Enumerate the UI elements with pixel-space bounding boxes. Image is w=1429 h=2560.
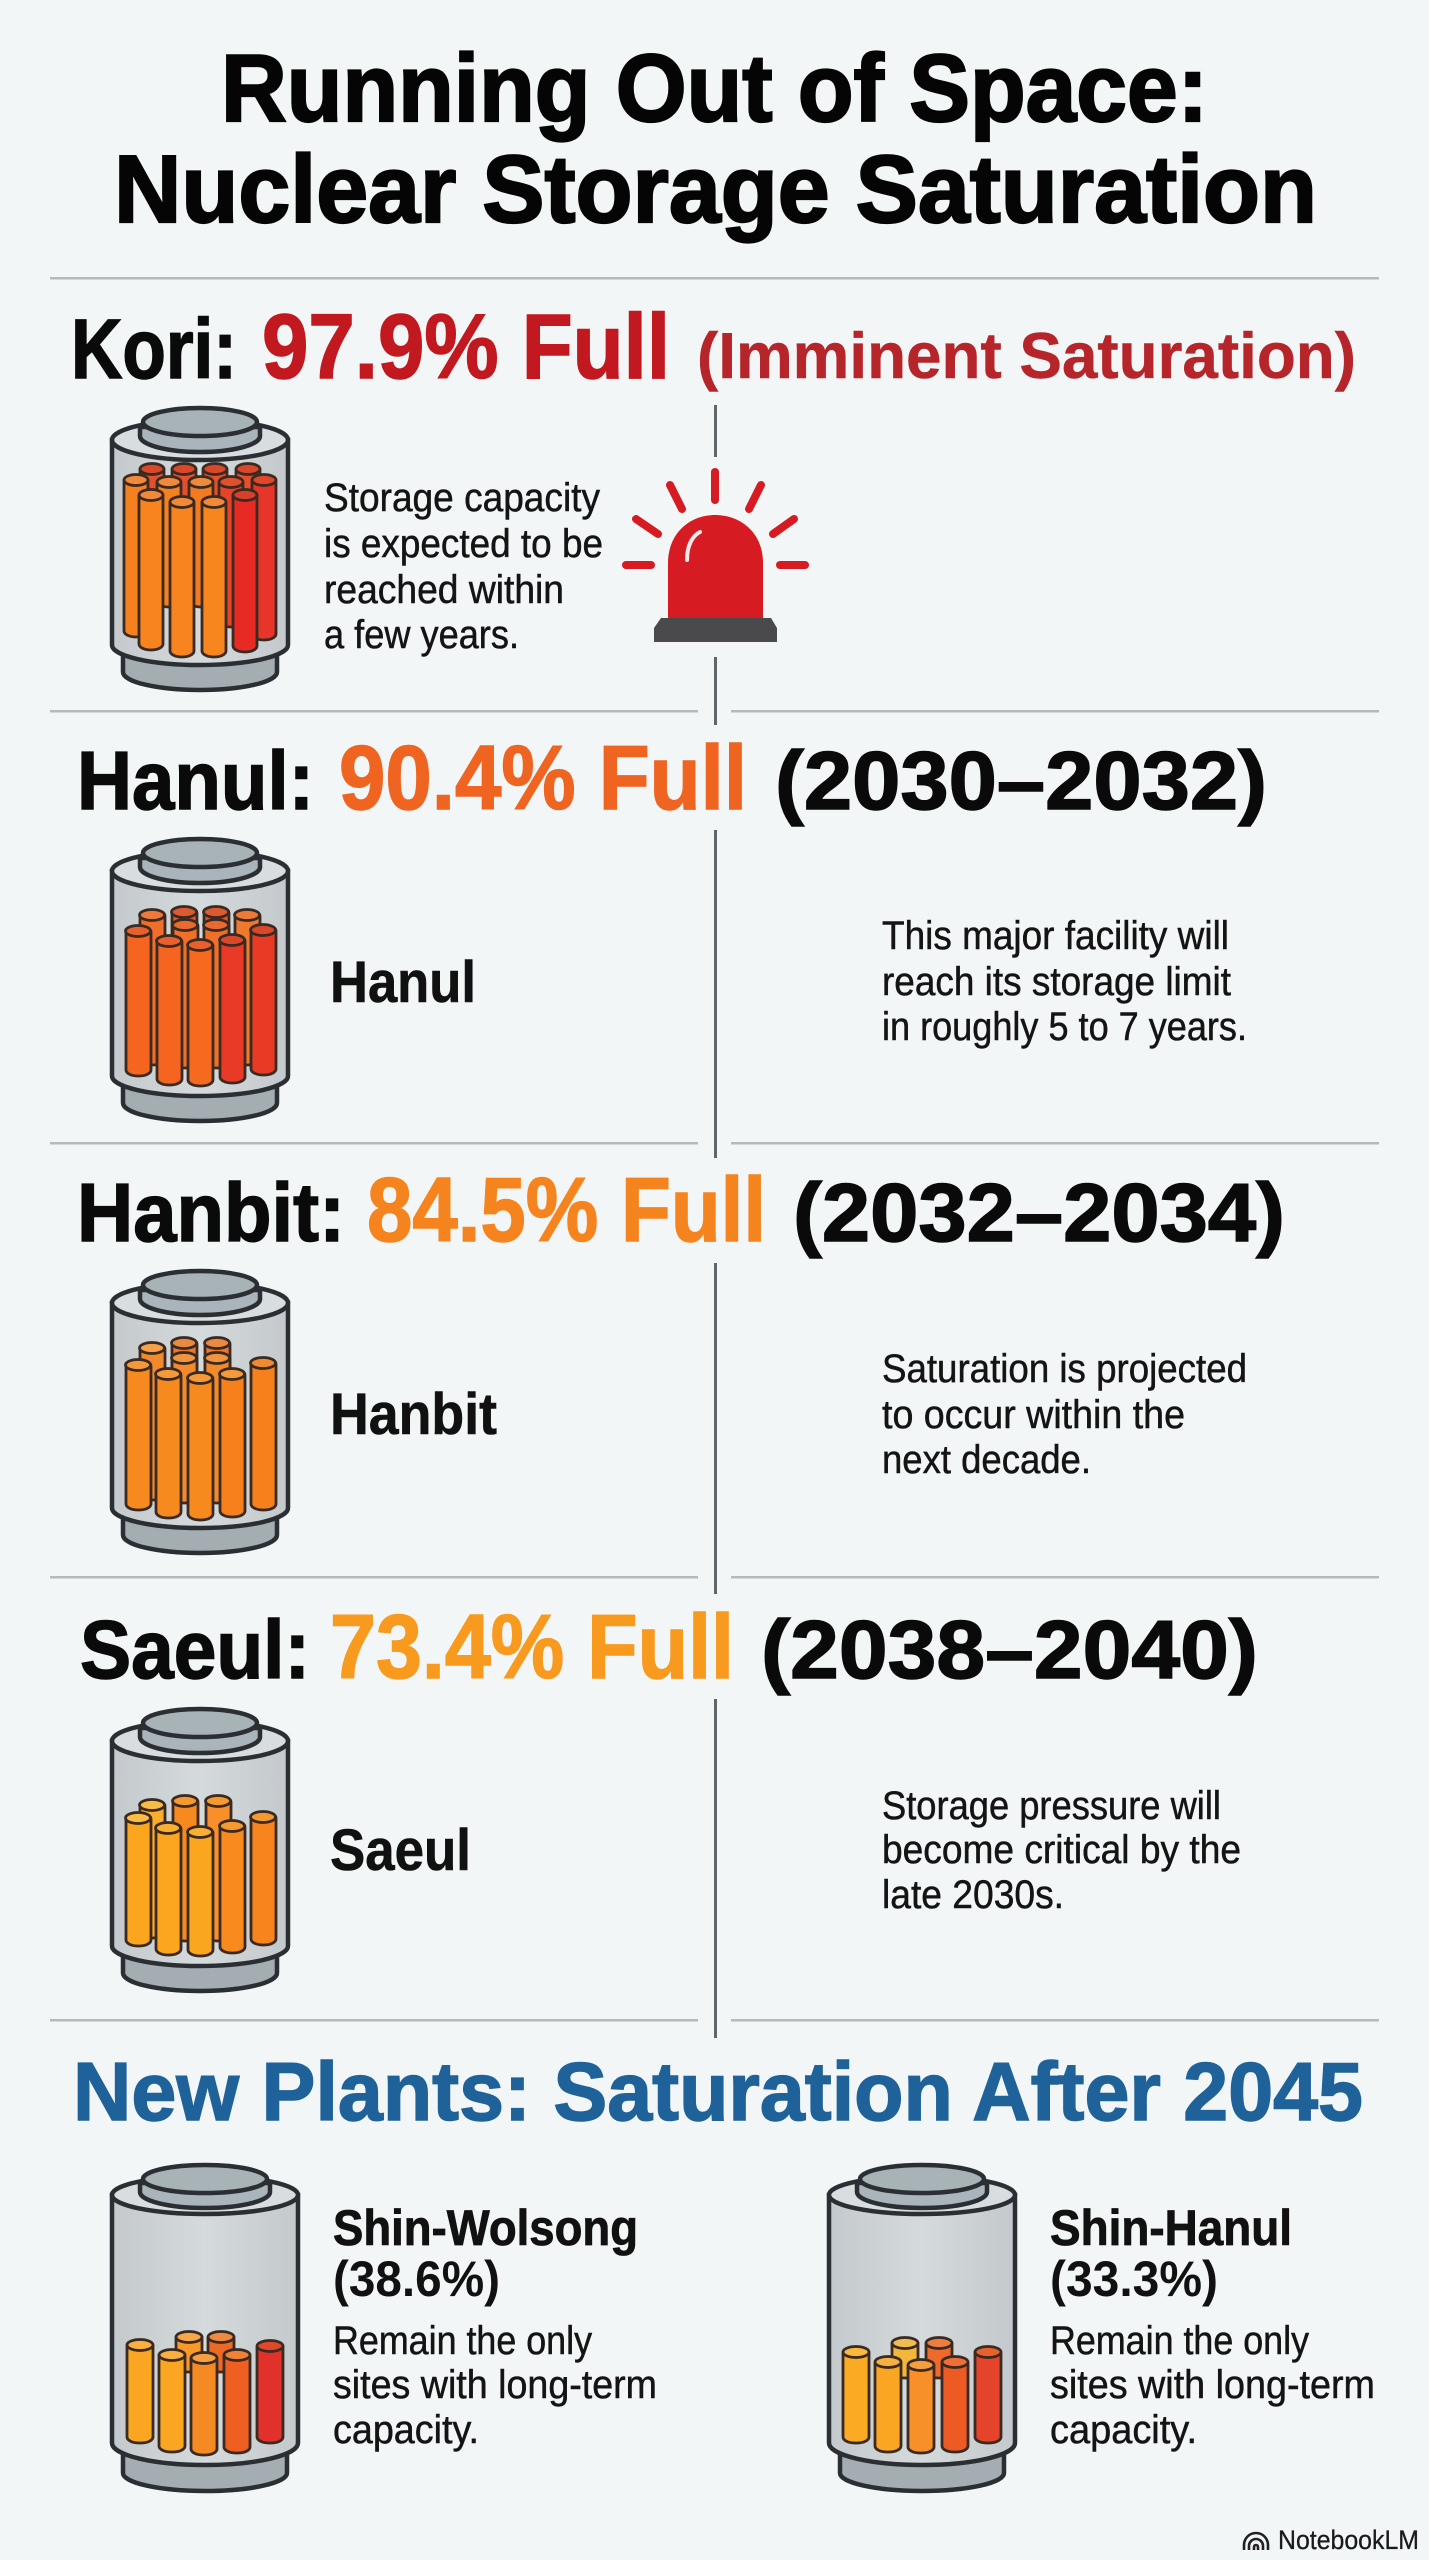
heading: Saeul: (2038–2040) (761, 1603, 1258, 1696)
text: Hanul description (882, 914, 1247, 1049)
icon: Kori canister (112, 408, 288, 690)
heading: Saeul: Saeul: (80, 1603, 310, 1696)
text: Kori description: reached within (324, 568, 564, 612)
label: Saeul: Saeul (330, 1818, 471, 1883)
text: Kori description: a few years. (324, 613, 519, 657)
text: Hanul description: This major facility will (882, 914, 1229, 958)
title: Nuclear Storage Saturation (114, 136, 1317, 243)
text: Hanbit description (882, 1347, 1247, 1482)
text: Kori description: Storage capacity (324, 476, 600, 520)
text: Shin-Hanul: sites with long-term (1050, 2363, 1375, 2407)
heading: Saeul: 73.4% Full (330, 1597, 734, 1698)
text: Hanbit description: next decade. (882, 1438, 1091, 1482)
heading: Kori: (Imminent Saturation) (697, 319, 1356, 392)
icon: Shin-Hanul canister (829, 2165, 1015, 2491)
icon: Hanbit canister (112, 1271, 288, 1553)
icon: NotebookLM arches (1244, 2533, 1268, 2550)
text: Shin-Wolsong (333, 2200, 657, 2452)
card: Shin-Hanul (829, 2165, 1375, 2491)
text: Shin-Hanul (1050, 2200, 1375, 2452)
heading: Hanbit: 84.5% Full (367, 1160, 766, 1261)
heading: Hanbit: (2032–2034) (793, 1166, 1285, 1259)
text: Hanbit description: to occur within the (882, 1393, 1185, 1437)
heading: Hanbit (77, 1160, 1285, 1261)
icon: Shin-Wolsong canister (112, 2165, 298, 2491)
heading: Kori: Kori: (71, 302, 237, 396)
heading: Saeul (80, 1597, 1258, 1698)
text: Kori description: is expected to be (324, 522, 603, 566)
heading: Hanbit: Hanbit: (77, 1166, 345, 1259)
icon: red alarm siren (626, 472, 805, 642)
panel: Kori (71, 296, 1356, 690)
text: Shin-Wolsong: sites with long-term (333, 2363, 657, 2407)
text: Shin-Hanul: (33.3%) (1050, 2251, 1218, 2307)
panel: Hanul (77, 728, 1267, 1121)
heading: Kori (71, 296, 1356, 398)
icon: Saeul canister (112, 1709, 288, 1991)
text: Hanul description: in roughly 5 to 7 years. (882, 1005, 1247, 1049)
text: Shin-Wolsong: Shin-Wolsong (333, 2200, 638, 2256)
text: Saeul description: become critical by the (882, 1828, 1241, 1872)
text: Shin-Hanul: capacity. (1050, 2408, 1197, 2452)
heading: Hanul: Hanul: (77, 734, 314, 827)
text: Saeul description: Storage pressure will (882, 1784, 1221, 1828)
text: Saeul description (882, 1784, 1241, 1917)
title (114, 35, 1317, 243)
label: Hanbit: Hanbit (330, 1382, 497, 1447)
heading: Hanul (77, 728, 1267, 829)
text: Shin-Wolsong: Remain the only (333, 2319, 592, 2363)
heading: Hanul: 90.4% Full (339, 728, 747, 829)
text: Shin-Wolsong: (38.6%) (333, 2251, 500, 2307)
text: Shin-Hanul: Remain the only (1050, 2319, 1309, 2363)
text: Hanul description: reach its storage limit (882, 960, 1231, 1004)
heading: New Plants: New Plants: Saturation After 2045 (73, 2045, 1363, 2138)
text: Shin-Hanul: Shin-Hanul (1050, 2200, 1292, 2256)
heading: Hanul: (2030–2032) (775, 734, 1267, 827)
panel: Hanbit (77, 1160, 1285, 1553)
NotebookLM logo: NotebookLM (1278, 2525, 1419, 2555)
panel: New Plants (73, 2045, 1375, 2491)
card: Shin-Wolsong (112, 2165, 657, 2491)
text: Kori description (324, 476, 603, 657)
text: Saeul description: late 2030s. (882, 1873, 1064, 1917)
icon: Hanul canister (112, 839, 288, 1121)
label: Hanul: Hanul (330, 950, 476, 1015)
text: Hanbit description: Saturation is projected (882, 1347, 1247, 1391)
heading: Kori: 97.9% Full (262, 296, 670, 398)
text: Shin-Wolsong: capacity. (333, 2408, 479, 2452)
panel: Saeul (80, 1597, 1258, 1991)
title: Running Out of Space: (221, 35, 1208, 142)
